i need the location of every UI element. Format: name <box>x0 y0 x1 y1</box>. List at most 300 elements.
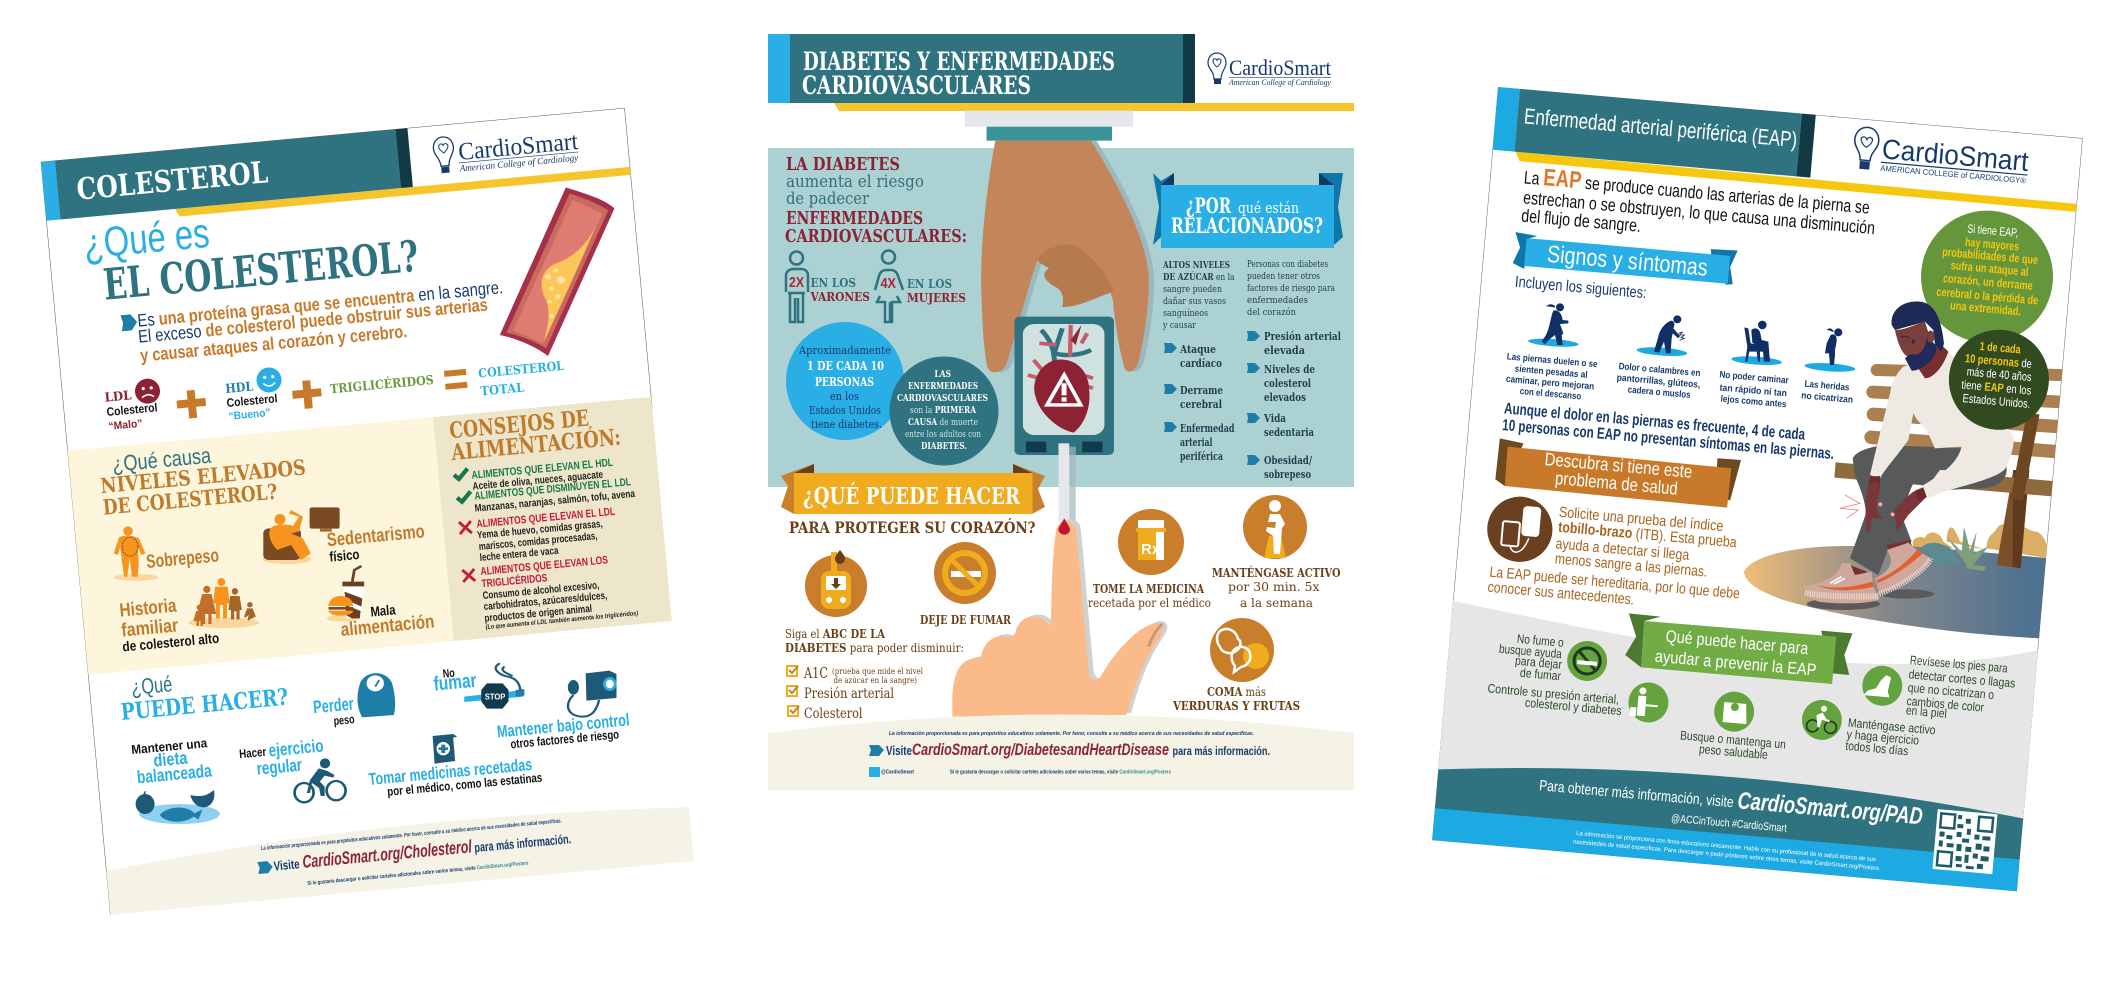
captions: symptoms: pantorrillas, glúteos, <box>1616 372 1701 391</box>
ribbon: por qué están relacionados: RELACIONADOS? <box>1171 213 1323 238</box>
tips list: carbohidratos, azúcares/dulces, <box>483 590 608 613</box>
label: deje de fumar: DEJE DE FUMAR <box>920 612 1011 627</box>
icon: female with 4X: MUJERES <box>907 290 966 305</box>
illustration: doctor hand with glucose meter <box>965 111 1154 455</box>
panel: EAP poster <box>1432 87 2105 893</box>
equation: LDL <box>103 378 163 433</box>
icon: stop smoking: STOP <box>485 692 506 702</box>
heading: qué es el colesterol: EL COLESTEROL? <box>101 232 421 311</box>
text block: otros factores: factores de riesgo para <box>1247 283 1335 294</box>
header banner: colesterol <box>41 108 631 229</box>
text block: abc de la diabetes: Siga el ABC DE LA <box>785 627 886 641</box>
label: no fumar: fumar <box>433 670 478 696</box>
text block: prueba itb: La EAP puede ser hereditaria, por lo que debe <box>1489 564 1740 602</box>
label: tome la medicina: recetada por el médico <box>1088 596 1211 610</box>
callout: mayores probabilidades: sufra un ataque al <box>1950 258 2029 279</box>
icon: person on armchair with TV <box>263 507 340 564</box>
label: ejercicio regular: ejercicio <box>268 736 324 761</box>
label: perder peso: peso <box>333 712 355 728</box>
text block: prueba itb: tobillo-brazo (ITB). Esta prueba <box>1558 519 1738 551</box>
callout: 1 de cada 10 personas <box>1948 330 2049 430</box>
text block: la diabetes: aumenta el riesgo <box>786 172 924 191</box>
tips list <box>452 455 646 633</box>
label: ejercicio regular <box>238 736 326 780</box>
ribbon text: descubra: problema de salud <box>1554 468 1679 499</box>
panel: causes <box>68 417 454 675</box>
label: historia familiar: familiar <box>120 615 180 642</box>
list: risk factors: Niveles de <box>1264 363 1315 376</box>
label: mala alimentación <box>339 598 435 641</box>
text block: intro: del flujo de sangre. <box>1521 206 1642 236</box>
label: mala alimentación: alimentación <box>340 611 435 641</box>
callout: 1 de cada 10: en los <box>830 390 859 403</box>
equation: HDL: HDL <box>225 378 254 396</box>
illustration: man, trousers and shoes <box>1804 445 2007 610</box>
captions: symptoms: caminar, pero mejoran <box>1505 374 1595 393</box>
icons: prevention <box>1567 641 1902 740</box>
text block: la diabetes: ENFERMEDADES <box>786 208 923 229</box>
list: consequences: Derrame <box>1180 384 1223 397</box>
text block: altos niveles: DE AZÚCAR en la <box>1163 271 1235 283</box>
icon: burger and soda <box>327 566 364 622</box>
label: coma más verduras: COMA más <box>1207 685 1266 699</box>
text blocks: prevention: de fumar <box>1519 666 1561 683</box>
text blocks: prevention: en la piel <box>1905 703 1947 721</box>
captions: symptoms: cadera o muslos <box>1627 384 1691 401</box>
tips list: Consumo de alcohol excesivo, <box>482 579 600 602</box>
heading: qué puede hacer: PUEDE HACER? <box>120 684 289 726</box>
callout: mayores probabilidades: hay mayores <box>1965 235 2020 254</box>
label: mantener bajo control: otros factores de riesgo <box>510 727 620 751</box>
heading: qué es el colesterol: ¿Qué es <box>82 209 211 267</box>
logo: CardioSmart: CardioSmart <box>1881 133 2030 177</box>
text block: abc de la diabetes: DIABETES para poder disminuir: <box>785 641 964 655</box>
callout: 1 de cada 10: PERSONAS <box>815 374 874 389</box>
text block: prueba itb: menos sangre a las piernas. <box>1554 550 1708 581</box>
icon: female with 4X: 4X <box>880 275 896 292</box>
equation: total: COLESTEROL <box>478 358 565 381</box>
icon: female with 4X <box>875 250 966 322</box>
footer: EAP: Para obtener más información, visite <box>1539 777 1734 811</box>
label: tomar medicinas: por el médico, como las estatinas <box>387 771 543 799</box>
callout: primera causa: CARDIOVASCULARES <box>897 393 988 404</box>
ribbon: por qué están relacionados: ¿POR <box>1186 194 1231 219</box>
text block: definition <box>120 277 507 367</box>
text blocks: prevention: para dejar <box>1514 654 1562 672</box>
footer: colesterol: Si le gustaría descargar o solicitar carteles adicionales sobre varios temas, visite CardioSmart.org/Posters <box>307 861 529 887</box>
label: historia familiar <box>118 592 220 655</box>
text block: aunque el dolor: 10 personas con EAP no presentan síntomas en las piernas. <box>1502 417 1835 463</box>
header banner: diabetes: DIABETES Y ENFERMEDADES <box>803 47 1115 76</box>
list: consequences: cerebral <box>1180 398 1222 411</box>
heading: qué puede hacer: ¿Qué <box>130 671 173 700</box>
panel: diabetes poster <box>768 34 1354 790</box>
ribbon text: descubra: Descubra si tiene este <box>1544 449 1693 482</box>
callout: 1 de cada 10 <box>786 322 904 440</box>
footer: diabetes: CardioSmart.org/DiabetesandHeartDisease <box>912 740 1169 759</box>
icon: artery with plaque <box>500 187 614 356</box>
captions: symptoms: sienten pesadas al <box>1514 364 1588 381</box>
heading: consejos: ALIMENTACIÓN: <box>449 424 622 466</box>
icon: plus <box>291 379 323 410</box>
illustration: bench slats <box>1835 370 2073 500</box>
heading: causes: NIVELES ELEVADOS <box>99 454 307 498</box>
list: risk factors: Vida <box>1263 412 1286 425</box>
ribbon: descubra <box>1495 438 1741 508</box>
list: consequences: cardíaco <box>1180 357 1222 370</box>
list: consequences: periférica <box>1180 450 1223 463</box>
callout: 1 de cada 10 personas: tiene EAP en los <box>1961 378 2032 398</box>
footer: EAP: @ACCinTouch #CardioSmart <box>1671 813 1787 835</box>
text block: intro: La EAP se produce cuando las arterias de la pierna se <box>1523 162 1871 220</box>
footer: colesterol: Visite <box>273 856 300 874</box>
label: dieta balanceada: Mantener una <box>131 735 208 757</box>
label: no fumar: No <box>442 666 455 681</box>
text block: la diabetes <box>785 154 967 247</box>
callout: 1 de cada 10 personas: Estados Unidos. <box>1962 391 2031 411</box>
header banner: EAP <box>1492 87 2083 212</box>
heading: causes: ¿Qué causa <box>111 443 213 477</box>
tips list: ALIMENTOS QUE ELEVAN LOS <box>480 554 609 578</box>
label: perder peso <box>312 694 356 730</box>
tips list: ALIMENTOS QUE ELEVAN EL HDL <box>471 457 614 482</box>
captions: symptoms <box>1506 352 1853 408</box>
text block: altos niveles: sangre pueden <box>1163 284 1222 295</box>
ribbon: qué puede hacer <box>781 464 1045 514</box>
icon: overweight person <box>114 526 158 581</box>
label: dieta balanceada <box>131 735 213 788</box>
label: ejercicio regular: regular <box>256 755 303 779</box>
callout: primera causa: entre los adultos con <box>905 430 981 440</box>
ribbon: signos y síntomas <box>1512 231 1738 287</box>
heading: qué es el colesterol <box>82 190 421 312</box>
text block: prueba itb: conocer sus antecedentes. <box>1487 579 1635 608</box>
text block: abc de la diabetes: Colesterol <box>804 706 863 722</box>
label: dieta balanceada: balanceada <box>136 760 213 787</box>
icon: medicine bottle <box>433 734 457 764</box>
equation: HDL: Colesterol <box>226 391 278 410</box>
callout: 1 de cada 10 personas: más de 40 años <box>1966 364 2032 384</box>
text block: abc de la diabetes: A1C <box>803 664 828 682</box>
label: sobrepeso: Sobrepeso <box>145 545 220 573</box>
heading: consejos: CONSEJOS DE <box>448 406 590 444</box>
list: risk factors <box>1247 330 1341 481</box>
equation: total: TOTAL <box>480 380 525 399</box>
icon: prescription bottle: Rx <box>1141 541 1161 558</box>
callout: mayores probabilidades: probabilidades de que <box>1942 245 2039 267</box>
illustration: ground, bushes and bench post <box>1744 470 2050 638</box>
list: risk factors: Obesidad/ <box>1264 454 1313 467</box>
tips list: Manzanas, naranjas, salmón, tofu, avena <box>474 488 636 515</box>
equation: LDL: LDL <box>104 387 132 405</box>
panel: nutrition tips <box>433 397 672 641</box>
callout: primera causa: son la PRIMERA <box>910 406 977 416</box>
footer: colesterol: CardioSmart.org/Cholesterol <box>301 836 473 872</box>
label: perder peso: Perder <box>312 694 354 717</box>
tips list: (Lo que aumenta el LDL también aumenta los triglicéridos) <box>485 610 638 631</box>
captions: symptoms: Las heridas <box>1804 379 1850 394</box>
captions: symptoms: no cicatrizan <box>1801 390 1854 406</box>
logo: CardioSmart: AMERICAN COLLEGE of CARDIOLOGY® <box>1880 164 2026 185</box>
label: no fumar <box>432 664 478 696</box>
callout: 1 de cada 10 personas: 1 de cada <box>1979 339 2021 357</box>
tips list: ALIMENTOS QUE ELEVAN EL LDL <box>476 506 616 530</box>
list: risk factors: sedentaria <box>1264 426 1314 439</box>
equation: LDL: “Malo” <box>108 418 143 433</box>
section background: teal <box>768 148 1354 487</box>
callout: primera causa: DIABETES. <box>921 441 967 452</box>
icon: prescription bottle <box>1118 509 1184 575</box>
captions: symptoms: Dolor o calambres en <box>1618 361 1701 379</box>
label: manténgase activo <box>1212 565 1341 610</box>
ribbon: signos y síntomas: Signos y síntomas <box>1546 241 1709 282</box>
text block: la diabetes: LA DIABETES <box>786 154 900 175</box>
label: manténgase activo: a la semana <box>1240 595 1314 610</box>
tips list: Aceite de oliva, nueces, aguacate <box>472 469 604 493</box>
text blocks: prevention: busque ayuda <box>1498 642 1562 661</box>
captions: symptoms: No poder caminar <box>1719 369 1789 386</box>
icon: ankle-brachial test <box>1487 496 1552 562</box>
label: historia familiar: Historia <box>119 595 178 622</box>
footer: diabetes: Visite <box>886 743 912 758</box>
footer: EAP <box>1432 768 2024 892</box>
icon: family <box>188 578 259 628</box>
equation: HDL <box>224 366 285 423</box>
text block: prueba itb: ayuda a detectar si llega <box>1555 535 1690 564</box>
header banner: colesterol: COLESTEROL <box>75 155 270 208</box>
footer: diabetes: La información proporcionada es para propósitos educativos solamente. Por favor, consulte a su médico acerca de sus necesidades de salud específicas. <box>889 731 1254 737</box>
footer: colesterol: La información proporcionada es para propósitos educativos solamente. Por favor, consulte a su médico acerca de sus necesidades de salud específicas. <box>261 818 562 852</box>
label: mantener bajo control <box>496 710 631 752</box>
text block: aunque el dolor: Aunque el dolor en las piernas es frecuente, 4 de cada <box>1503 400 1806 444</box>
list: risk factors: Presión arterial <box>1264 330 1341 343</box>
captions: symptoms: con el descanso <box>1519 386 1582 402</box>
icon: check <box>452 467 470 482</box>
footer: diabetes: Si le gustaría descargar o solicitar carteles adicionales sobre varios temas, visite CardioSmart.org/Posters <box>950 770 1171 776</box>
equation: triglicéridos: TRIGLICÉRIDOS <box>329 372 434 396</box>
list: risk factors: colesterol <box>1264 377 1311 390</box>
label: tome la medicina: TOME LA MEDICINA <box>1093 581 1204 596</box>
icon: healthy food <box>136 790 220 824</box>
icon: no smoking <box>934 542 996 604</box>
panel: colesterol poster <box>41 108 694 915</box>
section background: grey <box>1432 599 2038 891</box>
text block: abc de la diabetes: Presión arterial <box>804 686 894 702</box>
icon: QR code <box>1933 809 1998 874</box>
text block: otros factores <box>1247 259 1335 318</box>
tips list: TRIGLICÉRIDOS <box>481 571 548 590</box>
list: consequences: Ataque <box>1179 343 1216 356</box>
callout: 1 de cada 10: Estados Unidos <box>809 404 881 417</box>
text blocks: prevention: cambios de color <box>1906 694 1985 715</box>
ribbon: qué puede hacer <box>1625 613 1853 684</box>
text block: la diabetes: de padecer <box>786 189 869 208</box>
captions: symptoms: tan rápido ni tan <box>1719 382 1788 399</box>
callout: mayores probabilidades: cerebral o la pérdida de <box>1936 285 2039 307</box>
text block: altos niveles: dañar sus vasos <box>1163 296 1226 307</box>
label: mala alimentación: Mala <box>370 601 396 620</box>
text block: altos niveles: sanguíneos <box>1163 308 1208 319</box>
icon: blood pressure cuff <box>568 671 616 717</box>
ribbon: por qué están relacionados: qué están <box>1238 199 1299 217</box>
text blocks: prevention: y haga ejercicio <box>1846 727 1920 748</box>
illustration: man, sweater and head <box>1870 301 2014 498</box>
text blocks: prevention: peso saludable <box>1698 742 1768 762</box>
text block: abc de la diabetes: de azúcar en la sangre) <box>834 676 917 685</box>
callout: primera causa: LAS <box>934 369 951 380</box>
callout: primera causa: CAUSA de muerte <box>908 418 978 428</box>
callout: mayores probabilidades: corazón, un derrame <box>1942 271 2034 293</box>
list: consequences: arterial <box>1180 436 1212 449</box>
equation: LDL: Colesterol <box>106 400 158 419</box>
tips list: leche entera de vaca <box>479 545 559 564</box>
text block: otros factores: del corazón <box>1247 307 1296 318</box>
text: incluyen: Incluyen los siguientes: <box>1514 274 1647 302</box>
icon: equals <box>444 369 468 390</box>
footer: diabetes: para más información. <box>1172 744 1270 758</box>
logo: CardioSmart <box>1852 126 2030 185</box>
label: sedentarismo <box>326 521 427 565</box>
tips list: productos de origen animal <box>484 603 593 625</box>
tips list: mariscos, comidas procesadas, <box>478 530 598 553</box>
icon: cyclist <box>295 758 346 802</box>
text block: altos niveles: y causar <box>1162 320 1196 331</box>
label: mantener bajo control: Mantener bajo control <box>496 710 630 741</box>
callout: mayores probabilidades: una extremidad. <box>1950 298 2022 318</box>
ribbon text: qué puede hacer: Qué puede hacer para <box>1665 627 1810 658</box>
footer: EAP: CardioSmart.org/PAD <box>1737 787 1924 830</box>
text blocks: prevention: colesterol y diabetes <box>1524 696 1622 718</box>
text blocks: prevention: Manténgase activo <box>1847 716 1936 737</box>
list: risk factors: elevada <box>1264 344 1305 357</box>
footer: diabetes: @CardioSmart <box>881 770 914 776</box>
logo: CardioSmart <box>432 125 580 177</box>
illustration: finger with test strip <box>952 443 1167 717</box>
footer: EAP: La información se proporciona con fines educativos únicamente. Hable con su profesional de la salud acerca de sus <box>1576 831 1876 863</box>
text block: intro <box>1522 168 1874 234</box>
logo: CardioSmart: American College of Cardiology <box>458 153 579 175</box>
icon: vegetables and fruit <box>1210 618 1274 682</box>
ribbon text: qué puede hacer <box>1655 630 1816 676</box>
icon: female with 4X: EN LOS <box>907 276 952 291</box>
text block: la diabetes: CARDIOVASCULARES: <box>785 226 967 247</box>
equation: HDL: “Bueno” <box>228 407 271 423</box>
list: consequences <box>1164 343 1235 463</box>
text block: altos niveles <box>1162 260 1235 331</box>
text blocks: prevention: Busque o mantenga un <box>1680 728 1786 752</box>
logo: CardioSmart: American College of Cardiology <box>1228 78 1331 87</box>
text block: otros factores: Personas con diabetes <box>1247 259 1328 270</box>
callout: 1 de cada 10: 1 DE CADA 10 <box>807 358 884 373</box>
label: tome la medicina <box>1088 581 1211 610</box>
tips list: Yema de huevo, comidas grasas, <box>477 518 603 541</box>
label: tomar medicinas: Tomar medicinas recetadas <box>368 755 533 789</box>
label: manténgase activo: MANTÉNGASE ACTIVO <box>1212 565 1341 580</box>
ribbon: por qué están relacionados <box>1153 173 1343 248</box>
captions: symptoms: Las piernas duelen o se <box>1506 351 1598 370</box>
heading: consejos <box>447 403 622 466</box>
text blocks: prevention: detectar cortes o llagas <box>1908 667 2016 691</box>
label: sedentarismo: físico <box>329 546 360 565</box>
text block: altos niveles: ALTOS NIVELES <box>1162 260 1230 271</box>
callout: 1 de cada 10: tiene diabetes. <box>811 418 882 431</box>
icon: scale <box>357 673 395 717</box>
list: risk factors: sobrepeso <box>1264 468 1311 481</box>
icon: stop smoking <box>464 663 524 709</box>
footer: diabetes <box>768 714 1354 790</box>
list: risk factors: elevados <box>1264 391 1306 404</box>
label: dieta balanceada: dieta <box>153 748 189 771</box>
text block: otros factores: pueden tener otros <box>1247 271 1320 282</box>
callout: mayores probabilidades <box>1921 210 2054 340</box>
equation: total <box>478 358 566 399</box>
icon: male with 2X <box>786 252 870 322</box>
header banner: EAP: Enfermedad arterial periférica (EAP) <box>1523 103 1798 152</box>
heading: qué puede hacer <box>118 661 289 726</box>
icon: glucose meter <box>805 550 867 617</box>
list: consequences: Enfermedad <box>1180 422 1235 435</box>
text block: intro: estrechan o se obstruyen, lo que causa una disminución <box>1522 187 1876 238</box>
label: tomar medicinas <box>368 754 543 800</box>
tips list: ALIMENTOS QUE DISMINUYEN EL LDL <box>474 476 632 503</box>
label: ejercicio regular: Hacer <box>239 745 267 761</box>
ribbon text: qué puede hacer: ayudar a prevenir la EAP <box>1654 647 1817 680</box>
label: manténgase activo: por 30 min. 5x <box>1228 579 1320 594</box>
icon: male with 2X: VARONES <box>810 289 870 304</box>
text block: abc de la diabetes <box>785 627 964 722</box>
text blocks: prevention <box>1488 634 2015 759</box>
label: coma más verduras <box>1172 685 1300 713</box>
text blocks: prevention: No fume o <box>1516 632 1564 650</box>
text block: abc de la diabetes: (prueba que mide el nivel <box>832 667 923 676</box>
logo: CardioSmart: CardioSmart <box>457 128 579 166</box>
callout: 1 de cada 10: Aproximadamente <box>798 344 891 357</box>
text block: prueba itb: Solicite una prueba del índice <box>1558 504 1724 535</box>
text block: otros factores: enfermedades <box>1247 295 1308 306</box>
icon: plus <box>176 389 207 419</box>
icon: male with 2X: EN LOS <box>810 275 856 290</box>
heading: causes <box>97 434 309 520</box>
icon: male with 2X: 2X <box>789 274 804 291</box>
text block: definition: El exceso de colesterol puede obstruir sus arterias <box>137 295 489 347</box>
logo: CardioSmart: CardioSmart <box>1229 55 1331 80</box>
heading: causes: DE COLESTEROL? <box>102 479 278 520</box>
label: sedentarismo: Sedentarismo <box>326 521 426 551</box>
text block: prueba itb <box>1488 506 1740 604</box>
callout: primera causa <box>890 356 998 466</box>
heading: proteger su corazón: PARA PROTEGER SU CORAZÓN? <box>789 517 1036 537</box>
header banner: diabetes: CARDIOVASCULARES <box>802 71 1031 100</box>
callout: 1 de cada 10 personas: 10 personas de <box>1964 351 2033 371</box>
ribbon text: descubra <box>1546 452 1692 495</box>
icon: walking person <box>1243 495 1307 559</box>
callout: primera causa: ENFERMEDADES <box>908 381 978 392</box>
footer: colesterol <box>105 799 694 915</box>
illustration: man, sleeve and hands <box>1866 470 1946 532</box>
captions: symptoms: lejos como antes <box>1720 394 1787 410</box>
text blocks: prevention: Revísese los pies para <box>1909 653 2008 676</box>
label: historia familiar: de colesterol alto <box>122 630 220 655</box>
text blocks: prevention: todos los días <box>1845 739 1909 758</box>
text block: definition: Es una proteína grasa que se encuentra en la sangre. <box>137 277 504 331</box>
text blocks: prevention: que no cicatrizan o <box>1907 681 1995 702</box>
label: coma más verduras: VERDURAS Y FRUTAS <box>1172 698 1300 713</box>
header banner: diabetes <box>768 34 1354 111</box>
callout: mayores probabilidades: Si tiene EAP, <box>1967 221 2019 240</box>
text block: definition: y causar ataques al corazón y cerebro. <box>139 321 408 366</box>
footer: colesterol: para más información. <box>474 831 572 855</box>
ribbon: qué puede hacer: ¿QUÉ PUEDE HACER <box>803 481 1020 510</box>
